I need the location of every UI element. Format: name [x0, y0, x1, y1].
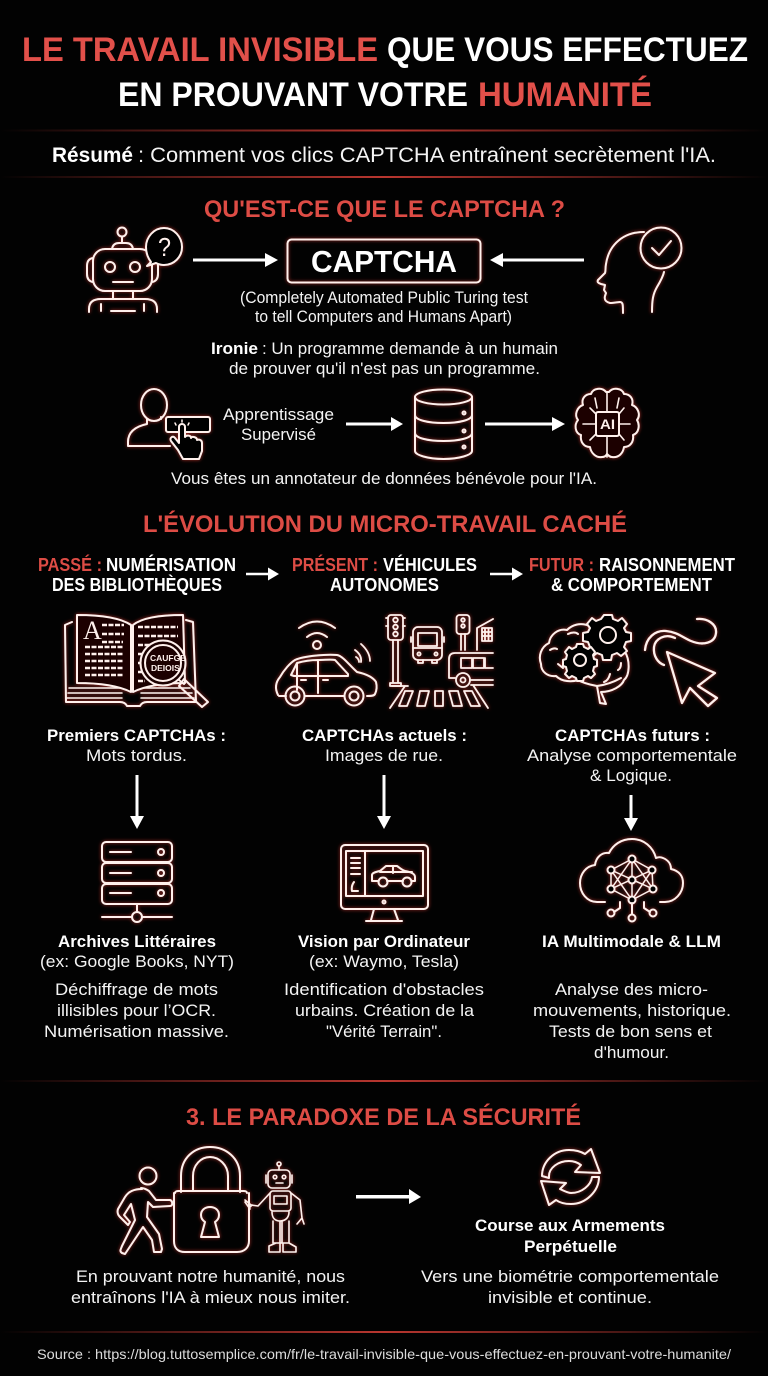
- column 3 heading: RAISONNEMENT: [599, 555, 735, 575]
- arrow: to AI brain: [485, 417, 565, 431]
- column 3 text: [527, 726, 737, 785]
- arrow: robot to captcha: [193, 253, 278, 267]
- bottom right text: invisible et continue.: [488, 1288, 652, 1307]
- column 2 heading: AUTONOMES: [330, 575, 439, 595]
- panel text: computer vision: Identification d'obstacles: [284, 980, 484, 999]
- heading: security paradox: 3. LE PARADOXE DE LA SÉCURITÉ: [186, 1103, 581, 1131]
- bottom left text: En prouvant notre humanité, nous: [76, 1267, 345, 1286]
- bottom left text: [71, 1267, 350, 1307]
- icon: open book with magnifier: DEIOIS: [151, 663, 180, 673]
- volunteer annotator text: Vous êtes un annotateur de données bénévole pour l'IA.: [171, 469, 597, 488]
- supervised learning label: [223, 406, 334, 444]
- panel text: archives: (ex: Google Books, NYT): [40, 952, 234, 971]
- panel text: archives: Archives Littéraires: [58, 932, 216, 951]
- panel text: archives: Déchiffrage de mots: [55, 980, 218, 999]
- panel text: multimodal AI: mouvements, historique.: [533, 1001, 731, 1020]
- column 1 text: [47, 726, 226, 765]
- panel text: multimodal AI: IA Multimodale & LLM: [542, 932, 721, 951]
- icon: person, padlock and robot: [118, 1147, 304, 1254]
- arrow: down column 3: [624, 795, 638, 831]
- column 2 text: [302, 726, 467, 765]
- column 2 heading: [292, 554, 477, 595]
- arrow: past to present: [246, 568, 279, 580]
- icon: sync arrows: [541, 1149, 600, 1205]
- bottom right text: Vers une biométrie comportementale: [421, 1267, 719, 1286]
- arrow: down column 1: [130, 775, 144, 829]
- title: QUE VOUS EFFECTUEZ: [387, 31, 748, 69]
- icon: open book with magnifier: CAUFGB: [150, 653, 186, 663]
- icon: robot with question bubble: ?: [158, 232, 171, 262]
- supervised learning label: Apprentissage: [223, 406, 334, 424]
- source: Source : https://blog.tuttosemplice.com/fr/le-travail-invisible-que-vous-effectuez-en-prouvant-votre-humanite/: [37, 1346, 731, 1362]
- icon: autonomous car: [276, 622, 377, 706]
- title: [22, 31, 748, 114]
- bottom right text: [421, 1267, 719, 1307]
- panel text: multimodal AI: [533, 932, 731, 1062]
- icon: server rack: [102, 842, 172, 922]
- column 1 heading: PASSÉ :: [38, 554, 102, 575]
- bottom left text: entraînons l'IA à mieux nous imiter.: [71, 1288, 350, 1307]
- panel text: multimodal AI: Tests de bon sens et: [549, 1022, 712, 1041]
- captcha expansion: [240, 289, 528, 326]
- column 3 heading: & COMPORTEMENT: [551, 575, 712, 595]
- panel text: archives: illisibles pour l’OCR.: [57, 1001, 216, 1020]
- irony text: [211, 339, 558, 378]
- panel text: computer vision: urbains. Création de la: [295, 1001, 475, 1020]
- icon: AI cloud network: [580, 839, 683, 922]
- captcha box: [288, 240, 480, 282]
- irony text: : Un programme demande à un humain: [262, 339, 558, 358]
- arms race label: Perpétuelle: [524, 1237, 617, 1256]
- irony text: Ironie: [211, 339, 258, 358]
- panel text: computer vision: "Vérité Terrain".: [326, 1022, 442, 1041]
- column 1 text: Premiers CAPTCHAs :: [47, 726, 226, 745]
- icon: street scene: [386, 615, 493, 708]
- icon: robot with question bubble: [87, 228, 182, 312]
- title: EN PROUVANT VOTRE: [118, 76, 468, 114]
- icon: cursor with trajectory: [645, 619, 717, 706]
- summary line: Résumé: [52, 144, 133, 167]
- title: LE TRAVAIL INVISIBLE: [22, 31, 378, 69]
- heading: evolution: L'ÉVOLUTION DU MICRO-TRAVAIL CACHÉ: [143, 510, 627, 538]
- robot: [245, 1162, 304, 1252]
- panel text: multimodal AI: d'humour.: [594, 1043, 669, 1062]
- captcha expansion: to tell Computers and Humans Apart): [255, 308, 512, 326]
- padlock: [174, 1147, 249, 1252]
- person: [118, 1168, 172, 1254]
- arrow: down column 2: [377, 775, 391, 829]
- arrow: to arms race: [356, 1189, 421, 1204]
- arrow: human to captcha: [490, 253, 584, 267]
- column 3 heading: FUTUR :: [529, 555, 594, 575]
- icon: AI brain: AI: [600, 416, 615, 432]
- icon: user clicking button: [128, 389, 210, 459]
- heading: qu'est-ce que le captcha: QU'EST-CE QUE LE CAPTCHA ?: [204, 196, 565, 223]
- column 2 heading: PRÉSENT :: [292, 554, 378, 575]
- summary line: : Comment vos clics CAPTCHA entraînent secrètement l'IA.: [138, 144, 716, 167]
- icon: open book with magnifier: A: [83, 616, 102, 645]
- supervised learning label: Supervisé: [241, 426, 316, 444]
- column 3 text: Analyse comportementale: [527, 746, 737, 765]
- panel text: archives: [40, 932, 234, 1041]
- captcha expansion: (Completely Automated Public Turing test: [240, 289, 528, 307]
- arrow: to database: [346, 417, 403, 431]
- column 1 heading: NUMÉRISATION: [106, 554, 236, 575]
- column 3 text: & Logique.: [590, 766, 672, 785]
- column 1 text: Mots tordus.: [86, 746, 187, 765]
- column 3 text: CAPTCHAs futurs :: [555, 726, 710, 745]
- icon: AI brain: [576, 389, 639, 457]
- panel text: multimodal AI: Analyse des micro-: [555, 980, 708, 999]
- column 1 heading: DES BIBLIOTHÈQUES: [52, 574, 222, 595]
- title: HUMANITÉ: [478, 76, 652, 114]
- panel text: computer vision: [284, 932, 484, 1041]
- panel text: computer vision: Vision par Ordinateur: [298, 932, 470, 951]
- captcha box: CAPTCHA: [311, 244, 457, 279]
- column 2 heading: VÉHICULES: [383, 554, 477, 575]
- icon: open book with magnifier: [65, 615, 208, 707]
- column 2 text: CAPTCHAs actuels :: [302, 726, 467, 745]
- icon: human head with check: [598, 228, 682, 313]
- icon: database: [415, 390, 472, 459]
- arms race label: Course aux Armements: [475, 1216, 665, 1235]
- icon: computer vision monitor: [341, 845, 428, 921]
- panel text: archives: Numérisation massive.: [44, 1022, 229, 1041]
- arms race label: [475, 1216, 665, 1256]
- column 2 text: Images de rue.: [325, 746, 443, 765]
- column 1 heading: [38, 554, 236, 595]
- arrow: present to future: [490, 568, 523, 580]
- column 3 heading: [529, 555, 735, 595]
- irony text: de prouver qu'il n'est pas un programme.: [229, 359, 540, 378]
- panel text: computer vision: (ex: Waymo, Tesla): [309, 952, 459, 971]
- icon: brain with gears: [540, 615, 631, 704]
